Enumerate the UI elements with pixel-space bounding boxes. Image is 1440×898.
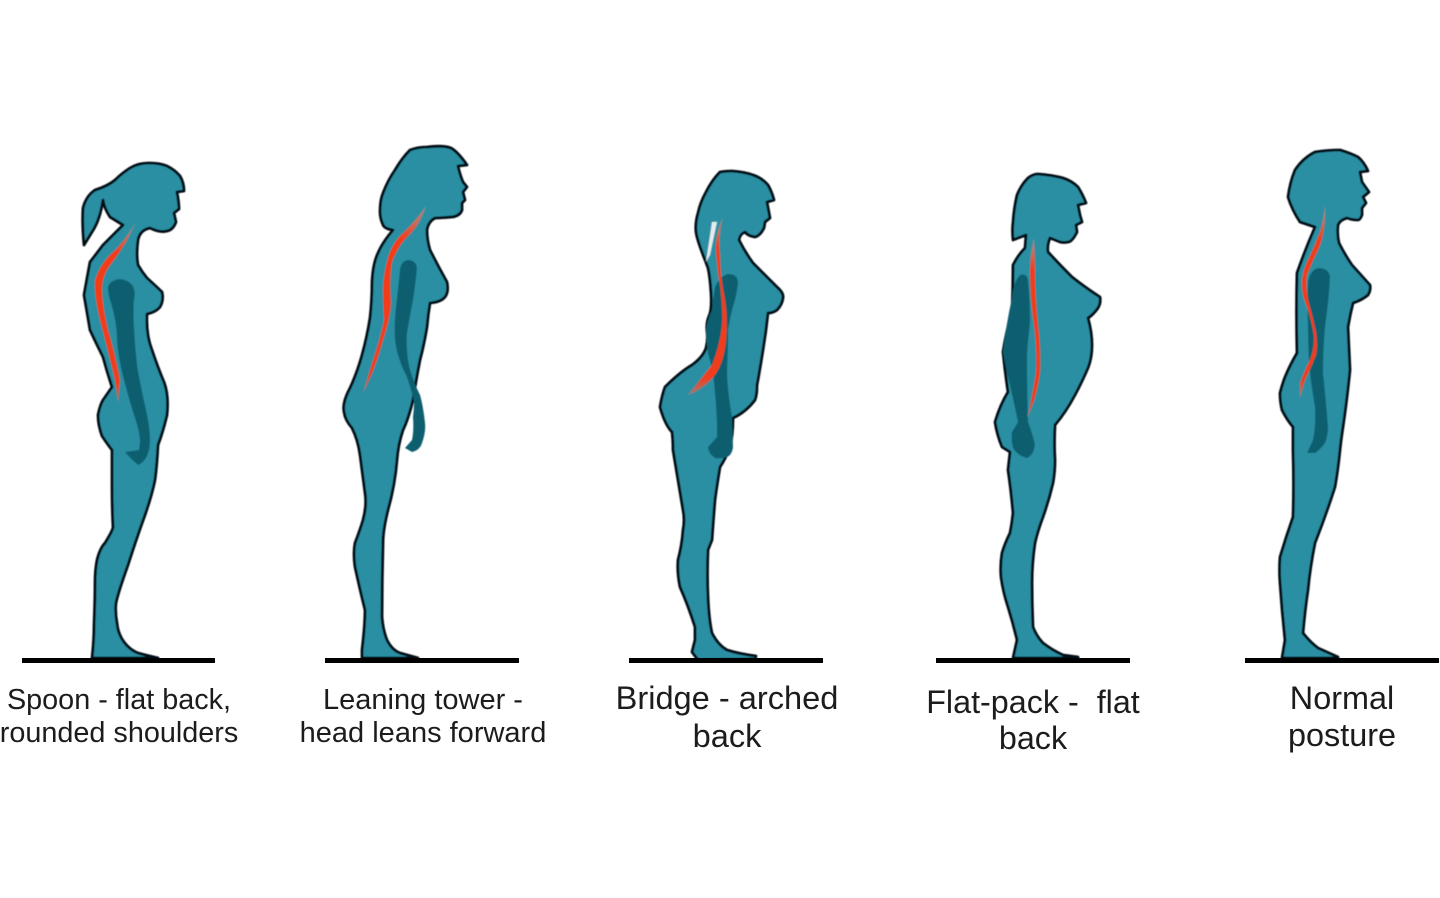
caption: normal: Normal [1290,680,1394,716]
body silhouette [660,171,783,660]
body silhouette [83,163,184,658]
figure: leaning tower posture [344,146,467,658]
arm [706,274,738,458]
arm [1003,275,1035,458]
caption: flat-pack: back [999,720,1068,756]
figure: bridge posture [660,171,783,660]
figure: flat-pack posture [995,174,1100,658]
caption: leaning tower: head leans forward [300,717,546,749]
caption: spoon: rounded shoulders [0,717,238,749]
caption: bridge: Bridge - arched [616,679,838,716]
caption: normal: posture [1288,717,1396,753]
figure: spoon posture [83,163,184,658]
caption: spoon: Spoon - flat back, [7,684,231,716]
spine [688,217,727,395]
ground lines [22,658,1439,663]
arm [395,260,425,452]
spine [1027,238,1040,418]
body silhouette [995,174,1100,658]
caption: bridge: back [693,717,762,754]
hair strands [706,222,717,262]
figure: normal posture [1280,150,1370,658]
arm [108,279,150,465]
spine [363,206,426,393]
arm [1307,268,1330,453]
body silhouette [1280,150,1370,658]
spine [1300,205,1325,398]
body silhouette [344,146,467,658]
caption: leaning tower: Leaning tower - [323,684,523,716]
caption: flat-pack: Flat-pack - flat [926,684,1140,720]
spine [95,220,137,403]
